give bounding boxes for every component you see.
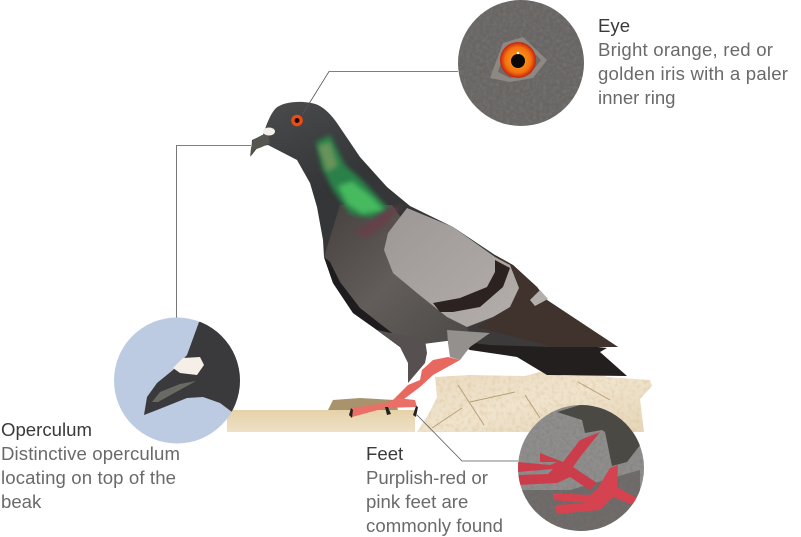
legs <box>393 357 460 402</box>
operculum text: beak <box>1 491 42 512</box>
purple neck band <box>355 204 403 238</box>
operculum <box>263 128 275 136</box>
eye ring <box>490 37 547 82</box>
lower body <box>324 205 470 347</box>
wing band <box>433 260 510 312</box>
operculum text <box>1 419 180 512</box>
callout circle: operculum close-up <box>114 310 245 444</box>
eye text <box>598 15 788 108</box>
eye text: Eye <box>598 15 630 36</box>
feet text <box>366 443 503 536</box>
iris <box>500 42 536 78</box>
ground shadow <box>518 470 640 531</box>
eye <box>291 115 303 126</box>
eye text: golden iris with a paler <box>598 63 788 84</box>
dark plumage <box>557 405 644 466</box>
feet text: pink feet are <box>366 491 468 512</box>
leader line: feet <box>417 415 518 461</box>
primary feathers <box>477 255 618 347</box>
left thigh <box>377 330 427 383</box>
pale thigh <box>447 330 490 360</box>
operculum text: Operculum <box>1 419 92 440</box>
feet text: Purplish-red or <box>366 467 488 488</box>
leader line: eye <box>302 72 458 115</box>
leader line: operculum <box>176 146 251 318</box>
feet text: commonly found <box>366 515 503 536</box>
callout circle: feet close-up <box>518 405 644 531</box>
front foot <box>553 465 637 514</box>
foot <box>352 398 417 417</box>
tail <box>447 336 627 376</box>
wing <box>384 208 519 327</box>
rock perch <box>227 370 655 434</box>
pigeon <box>250 102 627 418</box>
operculum text: Distinctive operculum <box>1 443 180 464</box>
body and neck <box>251 102 618 347</box>
callout circle: eye close-up <box>458 0 584 126</box>
green neck sheen <box>316 135 388 218</box>
rear foot <box>518 432 600 490</box>
claws <box>349 406 418 418</box>
eye text: Bright orange, red or <box>598 39 773 60</box>
eye text: inner ring <box>598 87 676 108</box>
operculum text: locating on top of the <box>1 467 176 488</box>
head <box>144 322 240 415</box>
feet text: Feet <box>366 443 404 464</box>
beak <box>250 134 270 157</box>
operculum <box>173 357 204 375</box>
beak highlight <box>152 381 196 402</box>
